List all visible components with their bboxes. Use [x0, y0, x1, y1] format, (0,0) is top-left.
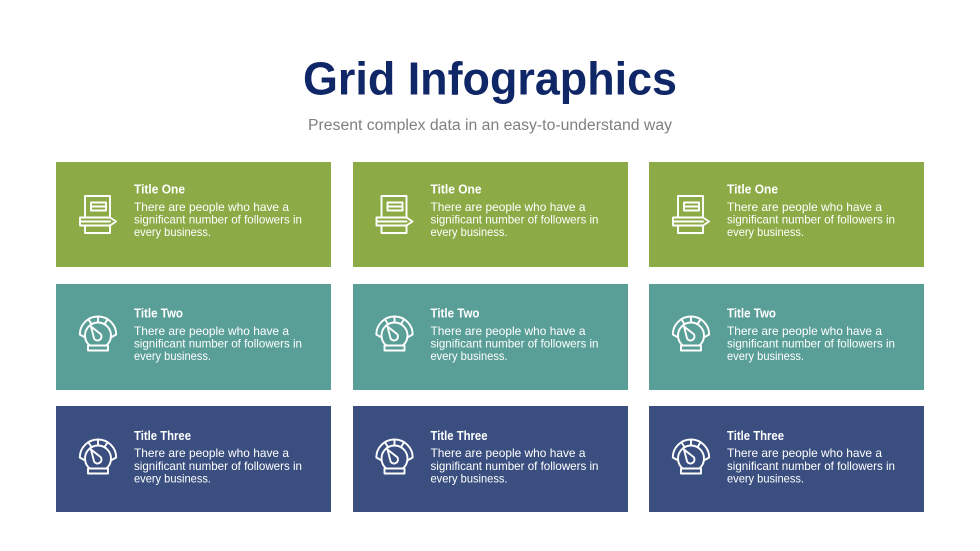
heading: Title Three: [134, 429, 191, 443]
body text: There are people who have a: [430, 324, 586, 338]
body text: There are people who have a: [727, 324, 882, 338]
icon: book and pencil: [376, 196, 412, 233]
body text: There are people who have a: [134, 324, 289, 338]
heading: Title Two: [430, 306, 480, 320]
body text: significant number of followers in: [430, 212, 598, 226]
heading: Title Three: [430, 429, 488, 443]
heading: Title Two: [727, 306, 776, 320]
body text: every business.: [430, 472, 508, 486]
card background: [353, 162, 628, 267]
icon: gauge: [673, 316, 709, 350]
heading: Title Three: [727, 429, 784, 443]
card background: [353, 406, 628, 512]
icon: gauge: [80, 316, 116, 350]
panel: row 3 column 1: [56, 406, 331, 512]
icon: gauge: [376, 440, 413, 474]
panel: row 2 column 1: [56, 284, 331, 390]
body text: [430, 200, 598, 239]
body text: significant number of followers in: [727, 459, 895, 473]
card background: [649, 162, 924, 267]
body text: There are people who have a: [430, 446, 586, 460]
body text: significant number of followers in: [134, 212, 302, 226]
body text: every business.: [430, 225, 508, 239]
card background: [56, 284, 331, 390]
body text: [727, 200, 895, 239]
body text: [134, 200, 302, 239]
body text: significant number of followers in: [727, 212, 895, 226]
body text: [727, 324, 895, 363]
panel: row 3 column 3: [649, 406, 924, 512]
panel: row 2 column 3: [649, 284, 924, 390]
panel: row 3 column 2: [353, 406, 628, 512]
body text: significant number of followers in: [134, 459, 302, 473]
body text: significant number of followers in: [430, 459, 598, 473]
body text: every business.: [134, 225, 211, 239]
panel: row 1 column 3: [649, 162, 924, 267]
heading: Title Two: [134, 306, 183, 320]
title: Grid Infographics: [303, 52, 677, 104]
icon: book and pencil: [80, 196, 116, 233]
icon: gauge: [80, 440, 116, 474]
body text: every business.: [134, 472, 211, 486]
body text: significant number of followers in: [134, 336, 302, 350]
body text: There are people who have a: [727, 446, 882, 460]
panel: row 1 column 2: [353, 162, 628, 267]
card background: [649, 406, 924, 512]
card background: [56, 406, 331, 512]
body text: [727, 446, 895, 486]
heading: Title One: [727, 182, 778, 196]
card background: [353, 284, 628, 390]
body text: [134, 324, 302, 363]
icon: gauge: [376, 316, 413, 350]
body text: every business.: [134, 349, 211, 363]
body text: [430, 446, 598, 486]
icon: book and pencil: [673, 196, 709, 233]
body text: There are people who have a: [727, 200, 882, 214]
body text: [430, 324, 598, 363]
body text: significant number of followers in: [430, 336, 598, 350]
panel: row 1 column 1: [56, 162, 331, 267]
icon: gauge: [673, 440, 709, 474]
heading: Title One: [134, 182, 185, 196]
panel: row 2 column 2: [353, 284, 628, 390]
body text: significant number of followers in: [727, 336, 895, 350]
heading: Title One: [430, 182, 482, 196]
subtitle: Present complex data in an easy-to-understand way: [308, 117, 672, 134]
body text: [134, 446, 302, 486]
card background: [649, 284, 924, 390]
body text: There are people who have a: [134, 200, 289, 214]
body text: There are people who have a: [134, 446, 289, 460]
card background: [56, 162, 331, 267]
body text: There are people who have a: [430, 200, 586, 214]
body text: every business.: [727, 472, 804, 486]
body text: every business.: [430, 349, 508, 363]
body text: every business.: [727, 225, 804, 239]
body text: every business.: [727, 349, 804, 363]
